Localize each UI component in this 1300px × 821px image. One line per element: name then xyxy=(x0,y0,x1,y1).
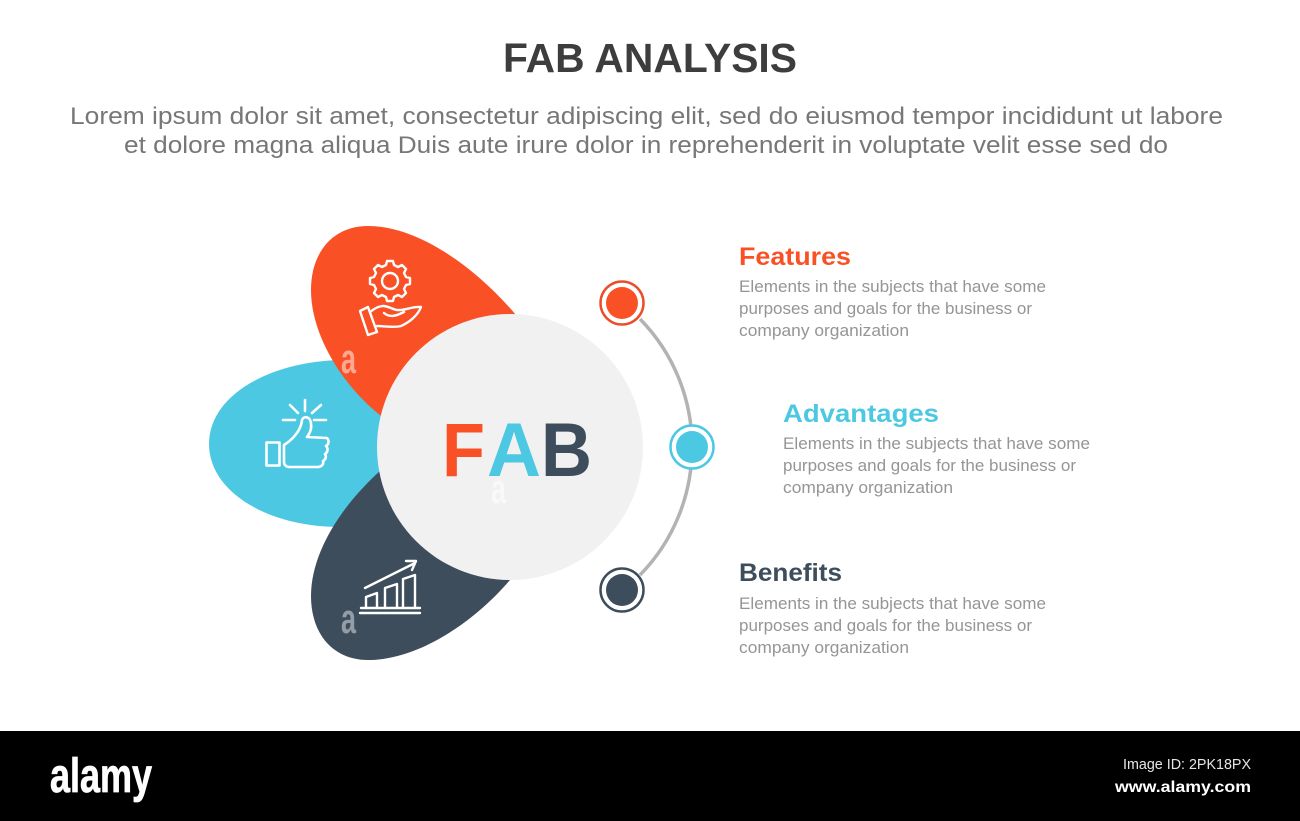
subtitle text: et dolore magna aliqua Duis aute irure dolor in reprehenderit in voluptate velit esse sed do xyxy=(124,132,1168,159)
text block: benefits xyxy=(739,559,1046,657)
icon: gear and hand xyxy=(360,261,421,335)
node: features xyxy=(600,282,644,324)
text block: advantages: purposes and goals for the business or xyxy=(783,456,1076,475)
text block: features: Elements in the subjects that have some xyxy=(739,277,1046,296)
text block: features xyxy=(739,243,1046,340)
subtitle text xyxy=(70,103,1223,159)
icon: growth chart xyxy=(360,561,420,613)
petal: advantages xyxy=(209,360,480,527)
text block: benefits: purposes and goals for the business or xyxy=(739,616,1032,635)
center label FAB xyxy=(442,408,592,493)
footer logo: alamy xyxy=(50,750,152,803)
watermark marks xyxy=(341,335,506,642)
footer bar xyxy=(0,731,1300,821)
center circle xyxy=(377,314,643,580)
timeline arc xyxy=(640,319,692,575)
icon: thumbs up xyxy=(266,400,329,467)
footer url: www.alamy.com xyxy=(1114,779,1251,796)
watermark marks: a xyxy=(341,335,356,382)
petal: features xyxy=(311,226,520,420)
text block: features: Features xyxy=(739,243,851,271)
text block: advantages xyxy=(783,400,1090,497)
watermark marks: a xyxy=(491,465,506,512)
center label FAB: F xyxy=(442,408,485,493)
center label FAB: B xyxy=(541,408,592,493)
petal: benefits xyxy=(311,470,520,660)
node: benefits xyxy=(600,568,644,612)
watermark marks: a xyxy=(341,595,356,642)
node: advantages xyxy=(670,426,714,468)
text block: advantages: company organization xyxy=(783,478,953,497)
center label FAB: A xyxy=(487,408,541,493)
text block: features: company organization xyxy=(739,321,909,340)
text block: benefits: Benefits xyxy=(739,559,842,587)
subtitle text: Lorem ipsum dolor sit amet, consectetur adipiscing elit, sed do eiusmod tempor incididunt ut labore xyxy=(70,103,1223,130)
text block: advantages: Advantages xyxy=(783,400,939,428)
petal diagram xyxy=(209,226,643,660)
title: FAB ANALYSIS xyxy=(503,35,797,81)
text block: advantages: Elements in the subjects that have some xyxy=(783,434,1090,453)
text block: benefits: Elements in the subjects that have some xyxy=(739,594,1046,613)
text block: features: purposes and goals for the business or xyxy=(739,299,1032,318)
footer image id: Image ID: 2PK18PX xyxy=(1123,756,1251,773)
text block: benefits: company organization xyxy=(739,638,909,657)
